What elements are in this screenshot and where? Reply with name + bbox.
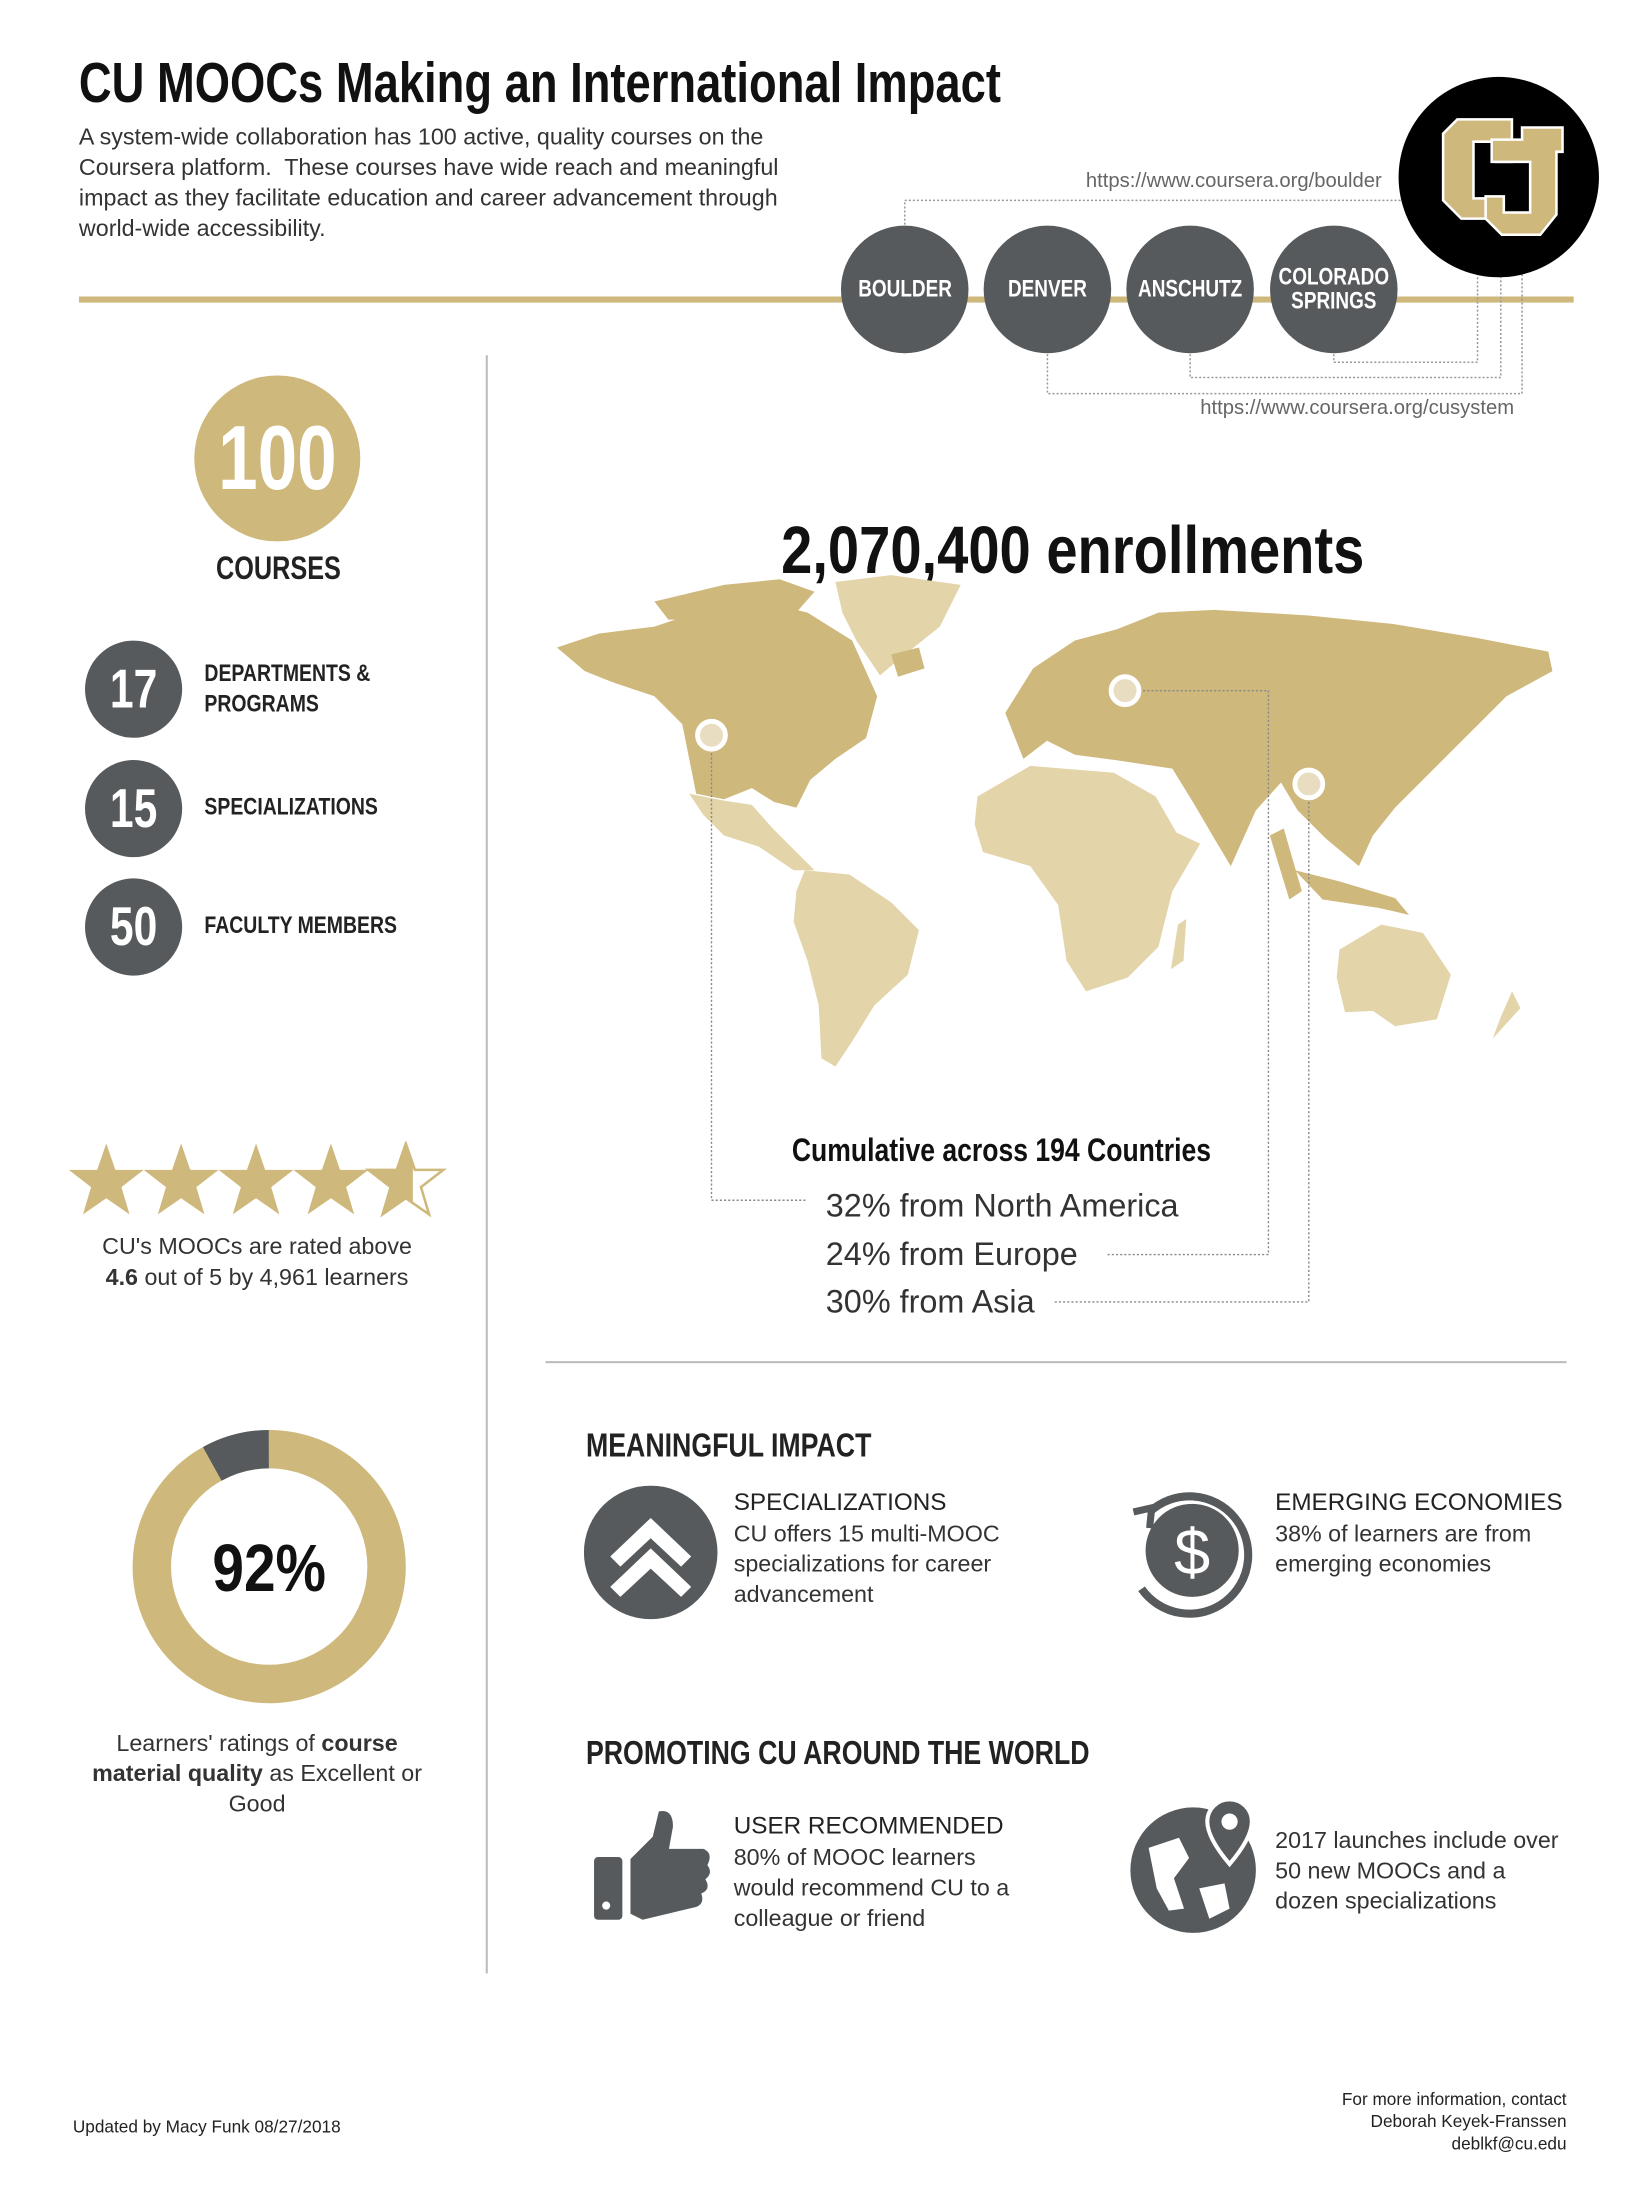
text: user recommended: 80% of MOOC learners would recommend CU to a colleague or friend [734, 1844, 1009, 1931]
icon: dollar [1132, 1492, 1252, 1618]
footer: contact: For more information, contact [1342, 2090, 1567, 2109]
campus circle: Anschutz: ANSCHUTZ [1138, 275, 1242, 303]
region percentages: 32% from North America [826, 1187, 1179, 1224]
title: CU MOOCs Making an International Impact [79, 51, 1001, 114]
CU logo [1399, 77, 1599, 277]
gold header line [79, 297, 1574, 303]
cumulative heading: Cumulative across 194 Countries [792, 1131, 1211, 1168]
text: emerging economies: EMERGING ECONOMIES [1275, 1489, 1563, 1516]
intro paragraph: A system-wide collaboration has 100 active, quality courses on the Coursera platform. These courses have wide reach and meaningful impact as they facilitate education and career advancement through world-wide accessibility. [79, 123, 778, 241]
heading: promoting CU: PROMOTING CU AROUND THE WORLD [586, 1734, 1090, 1771]
stat: 17 departments: 17 [110, 659, 157, 720]
stat: 50 faculty [85, 878, 397, 976]
stat: 50 faculty: FACULTY MEMBERS [204, 912, 397, 939]
campus circle: Colorado Springs [1270, 226, 1398, 353]
footer: contact: Deborah Keyek-Franssen [1371, 2112, 1567, 2131]
stat: 17 departments: PROGRAMS [204, 690, 319, 718]
enrollments heading: 2,070,400 enrollments [781, 512, 1364, 587]
vertical divider [486, 355, 488, 1973]
text: user recommended: USER RECOMMENDED [734, 1812, 1004, 1840]
footer: contact: deblkf@cu.edu [1452, 2134, 1567, 2154]
horizontal divider [545, 1361, 1567, 1363]
icon: dollar: $ [1174, 1516, 1210, 1589]
campus circle: Denver [984, 226, 1111, 353]
region percentages [826, 1187, 1179, 1320]
campus circle: Anschutz [1126, 226, 1254, 353]
text: specializations: SPECIALIZATIONS [734, 1489, 947, 1516]
text: 2017 launches: 2017 launches include over 50 new MOOCs and a dozen specializations [1275, 1827, 1559, 1914]
icon: globe with pin [1130, 1801, 1256, 1933]
stat: 17 departments: DEPARTMENTS & [204, 660, 370, 687]
stat: 17 departments [85, 640, 370, 738]
campus circle: Boulder [841, 226, 968, 353]
star rating [69, 1142, 447, 1218]
icon: thumbs up [594, 1811, 710, 1920]
url cusystem: https://www.coursera.org/cusystem [1200, 397, 1514, 419]
donut chart 92%: 92% [212, 1532, 326, 1606]
text: emerging economies: 38% of learners are from emerging economies [1275, 1520, 1531, 1577]
heading: meaningful impact: MEANINGFUL IMPACT [586, 1426, 871, 1463]
footer: updated by: Updated by Macy Funk 08/27/2018 [73, 2117, 341, 2136]
donut chart 92% [132, 1430, 406, 1704]
url boulder: https://www.coursera.org/boulder [1086, 170, 1382, 192]
rating caption: CU's MOOCs are rated above [102, 1233, 412, 1259]
icon: chevrons up [584, 1486, 718, 1620]
region percentages: 24% from Europe [826, 1235, 1078, 1272]
text: emerging economies [1275, 1489, 1563, 1577]
header connectors [904, 200, 1523, 394]
campus circle: Colorado Springs: SPRINGS [1291, 287, 1376, 315]
campus circle: Denver: DENVER [1008, 275, 1087, 303]
rating caption: 4.6 out of 5 by 4,961 learners [106, 1264, 408, 1290]
stat: 15 specializations [85, 760, 378, 858]
stat: 15 specializations: SPECIALIZATIONS [204, 793, 378, 821]
stat: 50 faculty: 50 [110, 897, 157, 957]
footer: contact [1342, 2090, 1567, 2154]
stat: 100 courses [194, 376, 360, 586]
rating caption [102, 1233, 412, 1290]
region percentages: 30% from Asia [826, 1283, 1035, 1320]
stat: 100 courses: 100 [218, 407, 337, 509]
campus circle: Colorado Springs: COLORADO [1279, 263, 1389, 290]
donut caption: Learners' ratings of course material quality as Excellent or Good [92, 1730, 422, 1817]
campus circle: Boulder: BOULDER [858, 275, 952, 303]
text: specializations: CU offers 15 multi-MOOC specializations for career advancement [734, 1520, 1000, 1607]
stat: 100 courses: COURSES [216, 550, 341, 586]
stat: 15 specializations: 15 [110, 778, 157, 839]
